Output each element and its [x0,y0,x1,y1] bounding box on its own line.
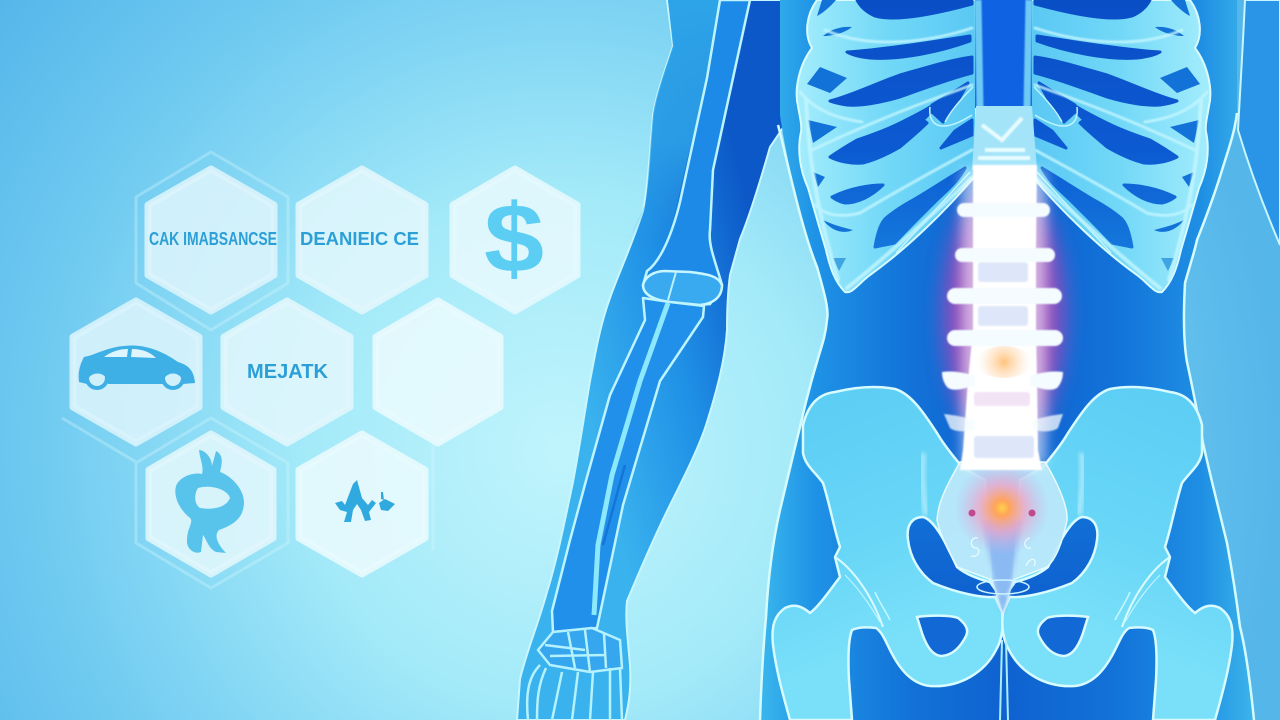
right arm [1238,0,1280,245]
rib cage [797,0,1210,292]
hexagon: dollar sign: $ [484,184,544,293]
spine glow [962,170,1046,465]
thigh inner lines [1000,640,1008,720]
hexagon: health label [224,301,350,443]
left pelvis half [772,387,1003,720]
thoracic transition [972,106,1037,170]
hexagon: car icon [73,301,199,443]
hexagon: activity icon [299,434,425,574]
humerus [643,0,750,306]
pelvis [772,387,1232,720]
hexagon: car insurance label [148,169,277,311]
hexagon: deanielc label: DEANIEIC CE [300,229,419,249]
sacral foramina [968,510,1036,594]
elbow joint [643,271,722,305]
upper spine column [975,0,1032,108]
icon: car [79,346,195,388]
spine [942,0,1063,470]
hexagon: deanielc label [299,169,425,311]
vertebra shading [974,262,1034,458]
sacrum hot spot [956,462,1048,554]
forearm bones [552,298,704,632]
right ribs [1031,0,1210,292]
hexagon: dollar sign [453,169,577,311]
torso rim light [760,113,1254,720]
left ribs [797,0,976,292]
arm silhouette [517,0,795,720]
purple glow behind spine [944,180,1064,450]
sacrum central channel [982,520,1022,615]
arm upper light shading [628,0,720,240]
vertebral column [960,165,1042,470]
hexagon: empty [376,301,500,443]
decorative frame: outer hex outlines [62,152,433,588]
torso silhouette [760,0,1254,720]
arm bones [552,0,750,632]
transverse processes [942,203,1063,431]
right pelvis half [1002,387,1232,720]
hand bones [527,628,622,720]
hexagon: spine icon [149,434,273,574]
sacrum [937,462,1067,615]
icon: small figures [335,480,395,522]
icon: twisted body [175,450,244,553]
lumbar hot spot [976,346,1032,378]
panel: hexagon grid [62,152,577,588]
hexagon: health label: MEJATK [247,361,329,383]
hexagon: car insurance label: CAK IMABSANCSE [149,229,277,249]
